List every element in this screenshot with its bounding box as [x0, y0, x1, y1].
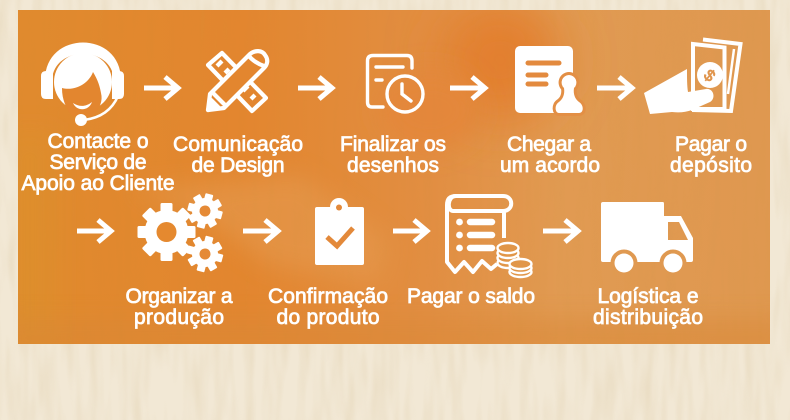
- text: Logística e distribuição: distribuição: [593, 306, 703, 329]
- arrow: [597, 77, 632, 99]
- icon: hand with banknotes: $: [700, 67, 718, 86]
- icon: receipt with coins: [447, 196, 532, 277]
- panel: orange painted background: [18, 10, 770, 344]
- text: Organizar a produção: produção: [134, 306, 224, 329]
- text: Contacte o Serviço de Apoio ao Cliente: [22, 130, 174, 195]
- arrow: [543, 220, 578, 242]
- text: Contacte o Serviço de Apoio ao Cliente: Contacte o: [48, 130, 148, 153]
- text: Comunicação de Design: Comunicação: [173, 133, 303, 156]
- icon: gears: [138, 190, 227, 276]
- text: Contacte o Serviço de Apoio ao Cliente: Apoio ao Cliente: [22, 172, 174, 195]
- icon: customer service headset: [41, 42, 124, 126]
- text: Logística e distribuição: [593, 285, 703, 329]
- text: Pagar o depósito: depósito: [670, 154, 752, 177]
- text: Confirmação do produto: do produto: [276, 306, 380, 329]
- text: Organizar a produção: Organizar a: [126, 285, 233, 308]
- text: Confirmação do produto: [268, 285, 388, 329]
- text: Chegar a um acordo: [500, 133, 600, 177]
- text: Finalizar os desenhos: Finalizar os: [340, 133, 446, 156]
- text: Comunicação de Design: [173, 133, 303, 177]
- text: Chegar a um acordo: Chegar a: [507, 133, 591, 156]
- text: Pagar o depósito: [670, 133, 752, 177]
- text: Contacte o Serviço de Apoio ao Cliente: Serviço de: [50, 151, 146, 174]
- icon: delivery truck: [601, 202, 693, 272]
- text: Logística e distribuição: Logística e: [598, 285, 698, 308]
- arrow: [450, 77, 485, 99]
- icon: contract with stamp: [515, 46, 583, 113]
- icon: document with clock: [368, 56, 423, 112]
- arrow: [243, 220, 278, 242]
- arrow: [393, 220, 427, 242]
- arrow: [298, 77, 332, 99]
- text: Chegar a um acordo: um acordo: [500, 154, 600, 177]
- arrow: [77, 220, 111, 242]
- text: Organizar a produção: [126, 285, 233, 329]
- icon: hand with banknotes: [644, 40, 740, 114]
- text: Finalizar os desenhos: [340, 133, 446, 177]
- text: Confirmação do produto: Confirmação: [268, 285, 388, 308]
- text: Finalizar os desenhos: desenhos: [347, 154, 439, 177]
- text: Comunicação de Design: de Design: [192, 154, 284, 177]
- text: Pagar o depósito: Pagar o: [675, 133, 747, 156]
- icon: ruler and pencil: [208, 51, 267, 111]
- icon: clipboard with check: [315, 198, 364, 265]
- arrow: [144, 77, 178, 99]
- text: Pagar o saldo: Pagar o saldo: [407, 285, 535, 308]
